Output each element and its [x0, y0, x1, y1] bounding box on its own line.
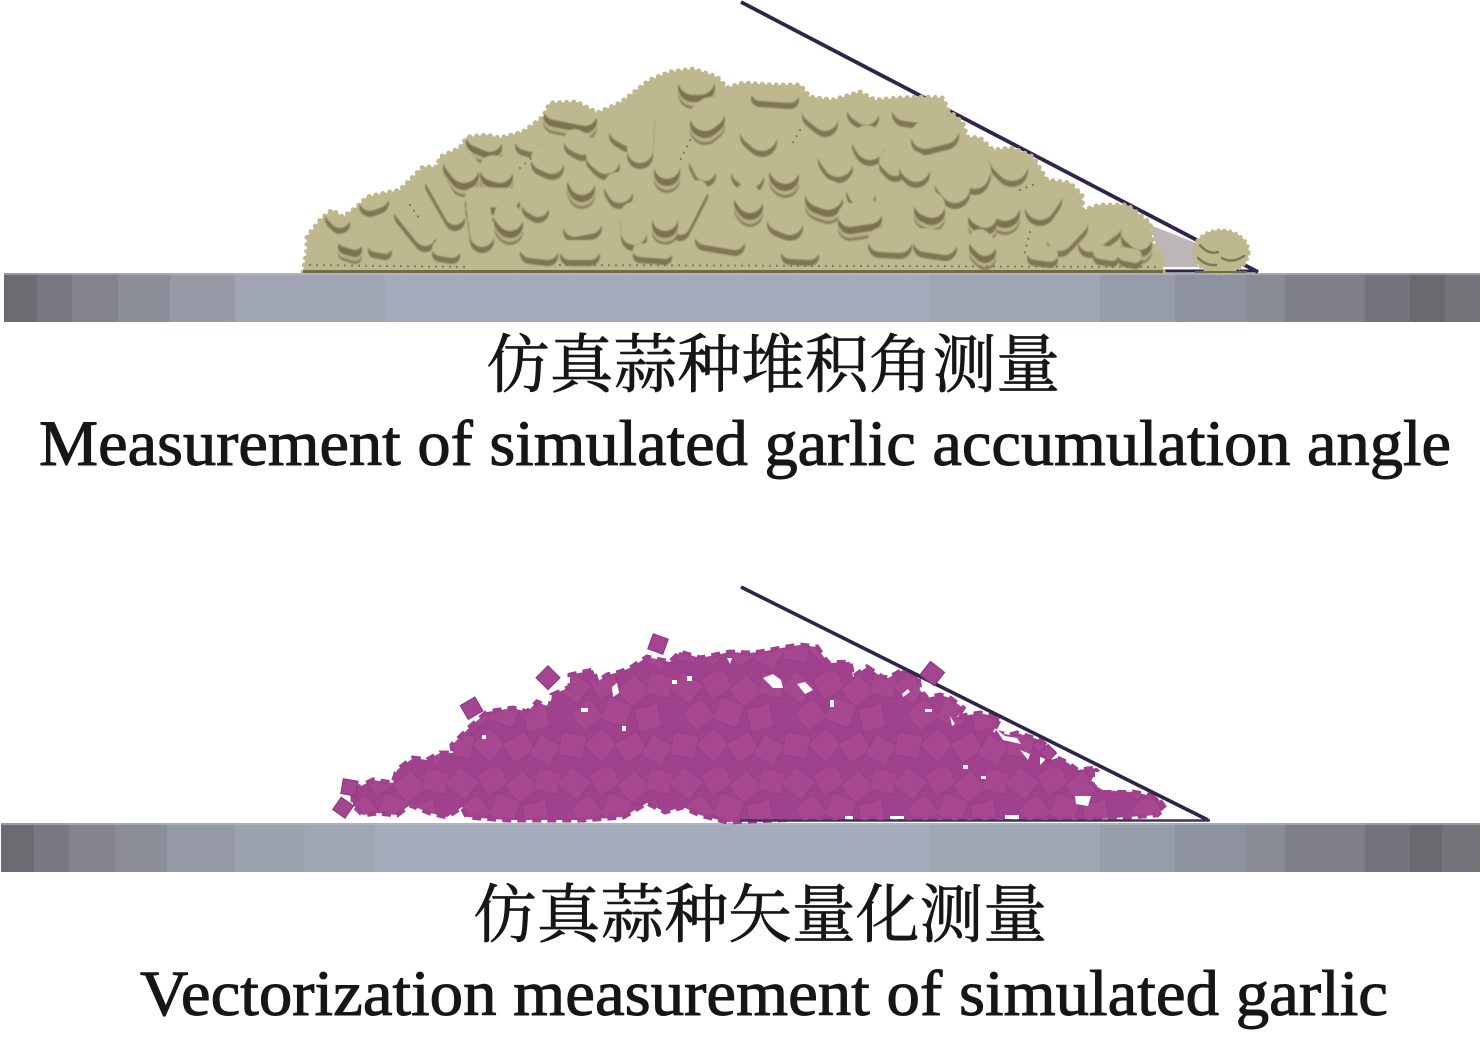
white gaps in the vectorized pile — [482, 658, 1128, 819]
chart: small detached garlic clump — [1193, 230, 1249, 274]
ground plate under garlic pile — [4, 273, 1480, 322]
grey wedge between pile and line — [1150, 225, 1198, 267]
chart: vectorized garlic pile — [353, 645, 1165, 822]
heading: Chinese caption for accumulation angle: 仿真蒜种堆积角测量 — [486, 330, 1060, 401]
heading: English caption for vectorization: Vectorization measurement of simulated garlic — [140, 958, 1388, 1030]
heading: English caption for accumulation angle: Measurement of simulated garlic accumulation angle — [39, 408, 1451, 480]
baseline of angle — [1158, 270, 1258, 272]
heading: Chinese caption for vectorization: 仿真蒜种矢量化测量 — [473, 880, 1047, 951]
measurement line: garlic accumulation angle — [741, 2, 1258, 272]
detached garlic cubes — [333, 634, 1056, 818]
vector line: base — [740, 819, 1210, 822]
surface speckle on the garlic pile — [310, 130, 1160, 267]
vector line: measured slope — [741, 587, 1208, 820]
chart: simulated garlic pile — [303, 69, 1163, 273]
ground plate under vectorized pile — [1, 823, 1480, 872]
